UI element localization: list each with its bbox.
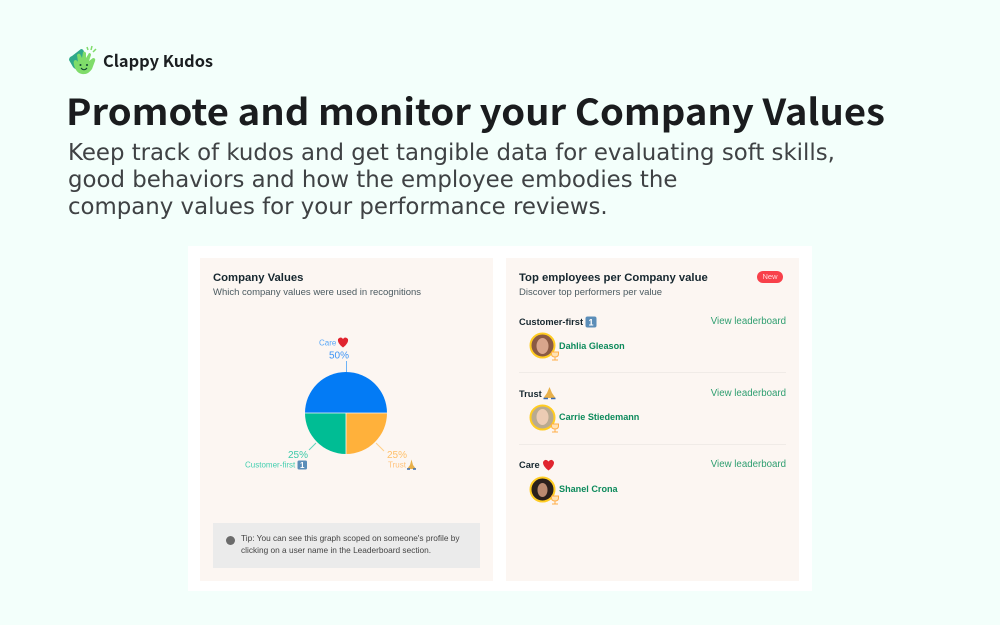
icon: praying hands [407,460,416,469]
value name: Customer-first [519,317,583,327]
badge: new [757,271,783,283]
label: customer-first: Customer-first [245,460,296,470]
slice: customer-first [305,413,346,454]
slice: care [305,372,387,413]
value: trust: 25% [387,450,407,461]
heading: Company Values [213,272,303,284]
subtitle: Keep track of kudos and get tangible data for evaluating soft skills, [68,140,835,166]
icon: heart [338,338,348,348]
panel: top employees [506,258,799,581]
icon: heart [543,460,554,470]
avatar [530,476,559,504]
name: Shanel Crona [559,484,618,494]
title: Promote and monitor your Company Values [66,84,885,136]
badge: new: New [762,272,778,281]
avatar [530,404,559,432]
tip text: Tip: You can see this graph scoped on someone's profile by [241,533,460,543]
avatar [530,332,559,360]
tip text [241,533,460,554]
link: View leaderboard [711,316,786,327]
link: View leaderboard [711,388,786,399]
icon: praying hands [544,387,556,400]
value name: Trust [519,389,542,399]
icon: keycap one [298,460,307,470]
row: care [519,459,786,504]
panel: screenshot frame [188,246,812,591]
icon: keycap one [586,316,596,328]
icon: info [226,536,235,545]
value name: Care [519,460,540,470]
value: customer-first: 25% [288,450,308,461]
link: View leaderboard [711,459,786,470]
icon: keycap one: 1 [300,461,305,470]
label: trust: Trust [388,460,407,470]
row: trust [519,387,786,432]
subtitle: company values for your performance reviews. [68,194,608,220]
icon: keycap one: 1 [588,318,594,328]
heading: Top employees per Company value [519,272,708,284]
row: customer-first [519,316,786,360]
subtitle: good behaviors and how the employee embodies the [68,167,677,193]
description: Discover top performers per value [519,287,662,298]
icon: clapping hand [69,46,96,74]
pie chart [245,338,416,470]
slice: trust [346,413,387,454]
logo: Clappy Kudos [69,46,213,74]
tip text: clicking on a user name in the Leaderboard section. [241,544,431,554]
callout: tip [213,523,480,568]
name: Carrie Stiedemann [559,412,639,422]
value: care: 50% [329,350,349,362]
panel: company values [200,258,493,581]
name: Dahlia Gleason [559,340,625,350]
logo text: Clappy Kudos [103,48,213,72]
label: care: Care [319,338,337,348]
description: Which company values were used in recognitions [213,287,421,298]
subtitle [68,140,835,220]
